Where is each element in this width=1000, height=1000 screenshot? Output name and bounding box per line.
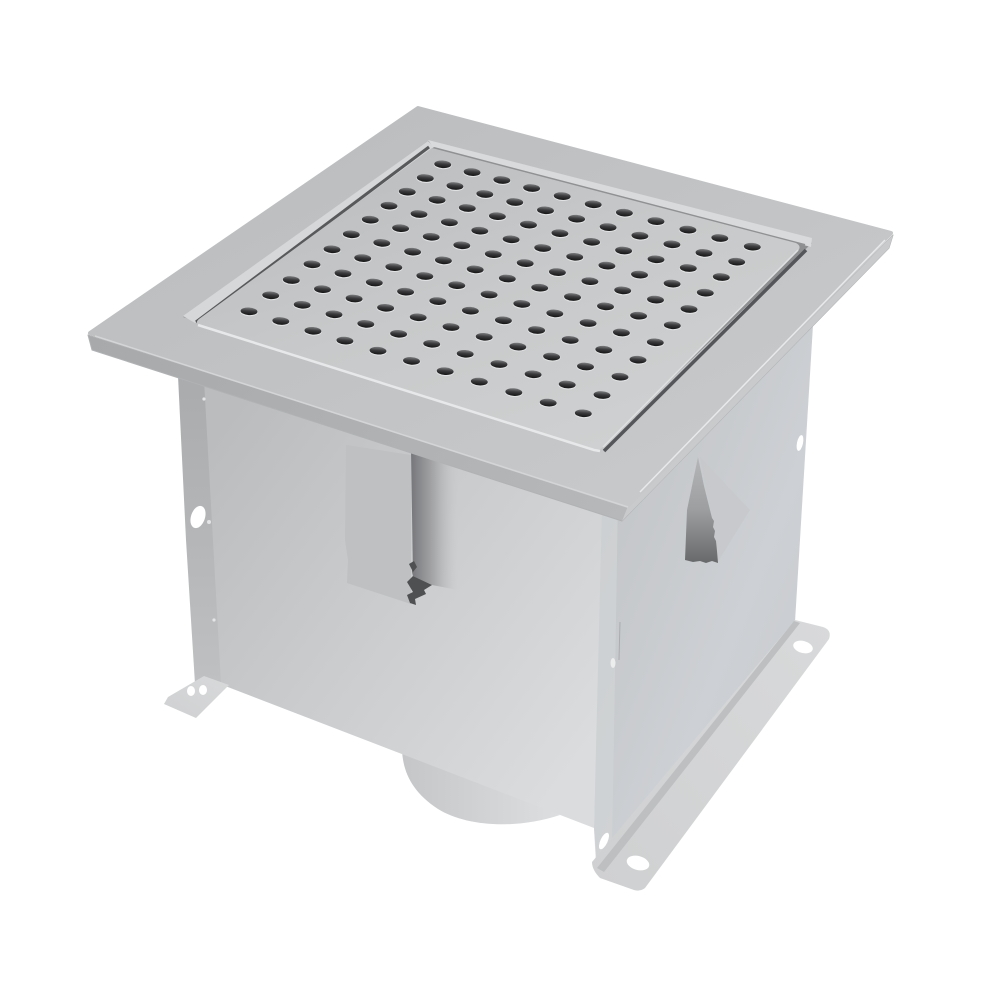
left inner fold lip	[183, 141, 434, 323]
dark left gap	[196, 147, 429, 322]
center cut-out shadow	[411, 450, 458, 590]
dark right gap	[604, 250, 806, 451]
small marks on right face	[610, 435, 805, 668]
top inner fold lip	[428, 140, 812, 247]
foot holes	[187, 686, 195, 696]
right side face of box	[594, 325, 813, 868]
left mounting foot	[164, 676, 229, 718]
grate holes	[240, 160, 762, 419]
grate plate	[197, 148, 800, 450]
front side face of box	[203, 378, 602, 828]
center tape patch	[345, 445, 411, 604]
right tape patch	[700, 457, 750, 563]
foot hole top	[792, 639, 814, 655]
frame highlight edges	[95, 240, 885, 507]
bottom grate lip	[198, 325, 600, 451]
right cut-out with torn edge	[685, 457, 718, 563]
left side flange strip	[178, 376, 221, 700]
frame lower right edge	[622, 235, 893, 521]
right side vertical flange strip	[594, 500, 618, 866]
hole in left strip	[188, 504, 208, 530]
corner slot	[597, 831, 611, 851]
inner window recess	[183, 141, 812, 450]
right mounting foot	[592, 620, 830, 891]
top lip shadow	[434, 148, 805, 245]
frame top face	[90, 108, 891, 506]
frame thick edge	[88, 235, 893, 521]
center jagged tear	[407, 561, 432, 605]
foot fold line	[597, 621, 800, 872]
right grate highlight	[603, 250, 798, 447]
foot hole bottom	[625, 853, 651, 873]
outlet pipe	[402, 750, 560, 824]
